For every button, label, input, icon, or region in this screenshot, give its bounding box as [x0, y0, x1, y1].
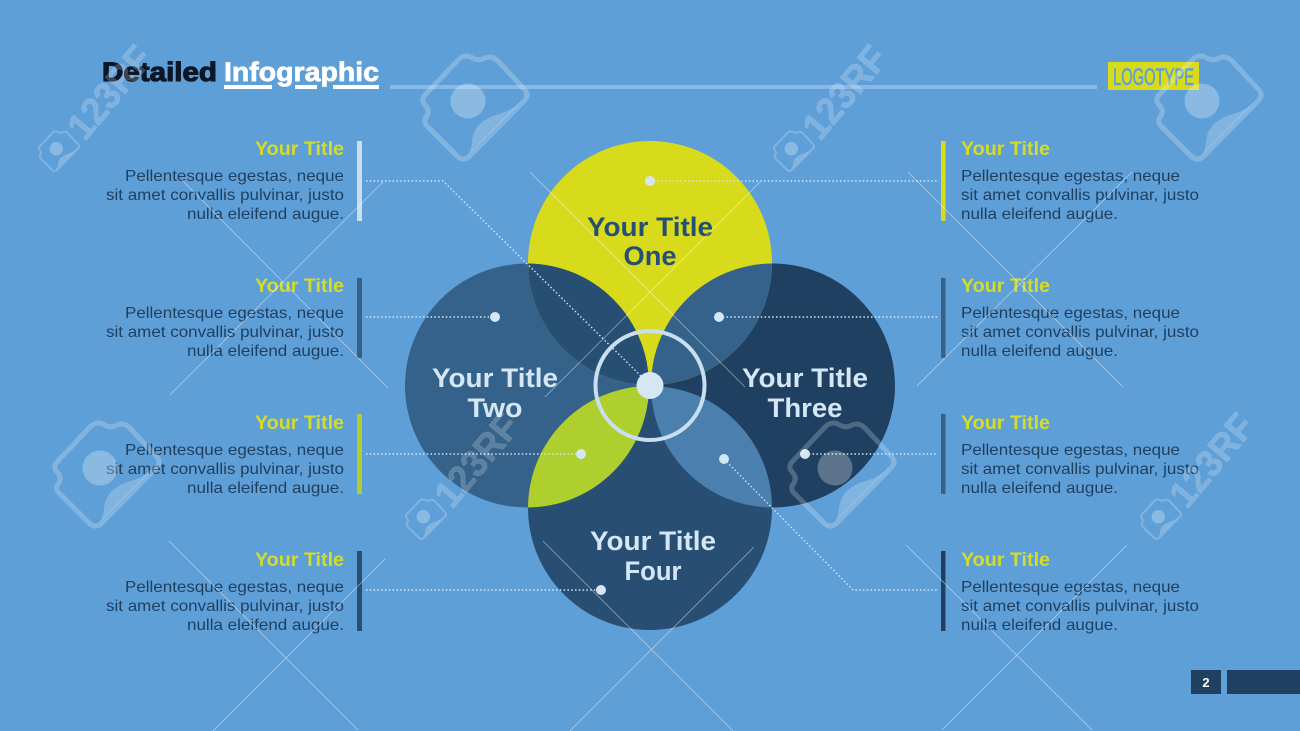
right block 2: [941, 276, 1199, 360]
label: one: Your Title: [587, 212, 713, 242]
right block 2: Your Title: [961, 276, 1050, 297]
right block 3: Pellentesque egestas, neque: [961, 442, 1180, 459]
watermark: 123RF marks: 123RF: [60, 38, 161, 148]
right block 1: [941, 139, 1199, 223]
right block 2: Pellentesque egestas, neque: [961, 305, 1180, 322]
left block 2: Your Title: [255, 276, 344, 297]
overlap: three and four: [652, 386, 772, 508]
right block 1: Pellentesque egestas, neque: [961, 168, 1180, 185]
left block 2: [106, 276, 362, 360]
label: four: Four: [624, 556, 682, 586]
right block 3: sit amet convallis pulvinar, justo: [961, 461, 1199, 478]
right block 1: nulla eleifend augue.: [961, 206, 1118, 223]
connector dots: [490, 176, 810, 595]
page number: [1191, 670, 1300, 694]
left block 1: Your Title: [255, 139, 344, 160]
logotype: LOGOTYPE: [1113, 64, 1194, 91]
right block 3: nulla eleifend augue.: [961, 480, 1118, 497]
right block 2: nulla eleifend augue.: [961, 343, 1118, 360]
center ring: [596, 331, 704, 440]
watermark: 123RF marks: 123RF: [1162, 406, 1263, 516]
left block 4: sit amet convallis pulvinar, justo: [106, 598, 344, 615]
watermark: 123RF marks: [39, 38, 1263, 539]
left block 4: Pellentesque egestas, neque: [125, 579, 344, 596]
right block 1: sit amet convallis pulvinar, justo: [961, 187, 1199, 204]
right block 4: [941, 550, 1199, 634]
right block 4: Pellentesque egestas, neque: [961, 579, 1180, 596]
circle: four: [528, 386, 772, 630]
circle: one: [528, 141, 772, 385]
page number: 2: [1202, 675, 1210, 690]
label: three: [742, 363, 868, 423]
left block 1: Pellentesque egestas, neque: [125, 168, 344, 185]
left block 3: Your Title: [255, 413, 344, 434]
right block 4: sit amet convallis pulvinar, justo: [961, 598, 1199, 615]
right block 1: Your Title: [961, 139, 1050, 160]
left block 1: [106, 139, 362, 223]
left block 1: nulla eleifend augue.: [187, 206, 344, 223]
watermark crosshair lines: [169, 172, 1132, 731]
label: one: One: [624, 241, 676, 271]
right block 4: Your Title: [961, 550, 1050, 571]
label: two: Two: [468, 393, 522, 423]
header rule: [390, 85, 1097, 89]
left block 3: [106, 413, 362, 497]
left block 2: Pellentesque egestas, neque: [125, 305, 344, 322]
logotype: [1108, 62, 1199, 91]
title: [102, 57, 379, 89]
venn diagram: [405, 141, 895, 630]
overlap: two and four: [528, 386, 648, 508]
left block 4: [106, 550, 362, 634]
left block 1: sit amet convallis pulvinar, justo: [106, 187, 344, 204]
circle: three: [651, 264, 895, 508]
right block 3: Your Title: [961, 413, 1050, 434]
label: three: Your Title: [742, 363, 868, 393]
left block 4: Your Title: [255, 550, 344, 571]
connector lines: [366, 181, 938, 590]
label: two: Your Title: [432, 363, 558, 393]
left block 3: nulla eleifend augue.: [187, 480, 344, 497]
right block 4: nulla eleifend augue.: [961, 617, 1118, 634]
left block 3: Pellentesque egestas, neque: [125, 442, 344, 459]
overlap: one and two: [528, 264, 648, 384]
left block 3: sit amet convallis pulvinar, justo: [106, 461, 344, 478]
left block 4: nulla eleifend augue.: [187, 617, 344, 634]
left block 2: sit amet convallis pulvinar, justo: [106, 324, 344, 341]
right block 2: sit amet convallis pulvinar, justo: [961, 324, 1199, 341]
title: Detailed: [102, 57, 217, 87]
label: three: Three: [768, 393, 842, 423]
watermark: 123RF marks: 123RF: [795, 38, 896, 148]
label: four: Your Title: [590, 526, 716, 556]
left block 2: nulla eleifend augue.: [187, 343, 344, 360]
label: two: [432, 363, 558, 423]
watermark: 123RF marks: 123RF: [427, 406, 528, 516]
label: one: [587, 212, 713, 271]
watermark: large stamps: [55, 56, 1261, 526]
label: four: [590, 526, 716, 586]
right block 3: [941, 413, 1199, 497]
circle: two: [405, 264, 649, 508]
title: Infographic: [224, 57, 379, 87]
overlap: one and three: [652, 264, 772, 384]
